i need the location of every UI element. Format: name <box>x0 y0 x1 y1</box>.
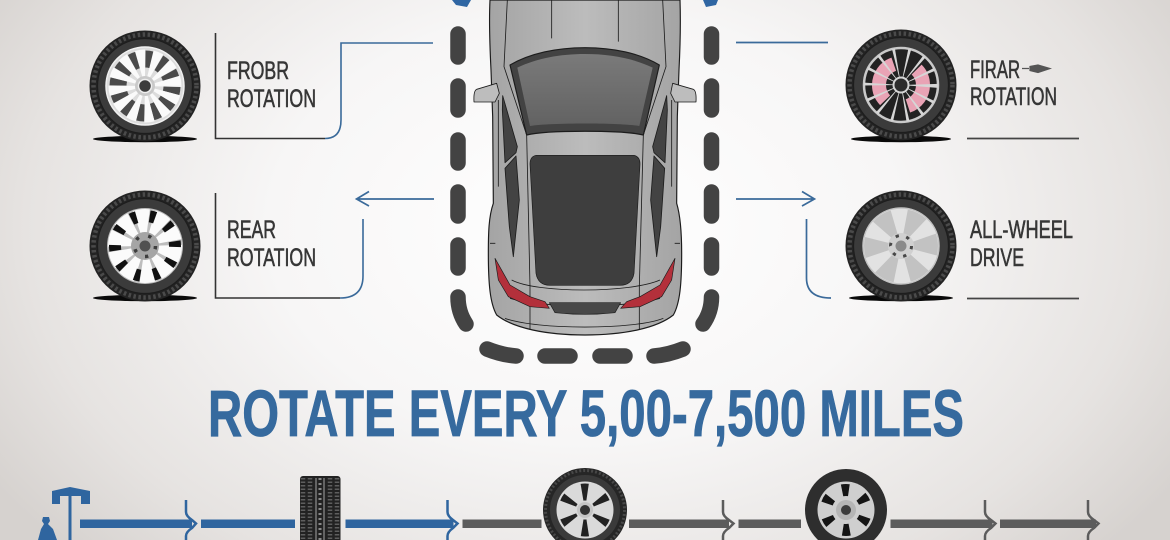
timeline: grey segments <box>462 520 1096 528</box>
label: REAR ROTATION <box>227 216 316 272</box>
car tail lights <box>495 258 675 308</box>
dashed rotation path around car <box>458 34 712 356</box>
label: FIRAR ROTATION <box>970 56 1057 111</box>
label: REAR ROTATION: REAR <box>227 216 276 244</box>
connector: right lower curve <box>806 219 831 298</box>
label: ALL-WHEEL DRIVE: DRIVE <box>970 244 1024 272</box>
label: FROBR ROTATION <box>227 57 316 113</box>
rule under FIRAR ROTATION <box>967 138 1079 140</box>
car windshield <box>510 48 659 135</box>
arrow: pointing right <box>736 192 814 206</box>
icon: tyre tread <box>300 476 340 540</box>
front wheel (front-left) <box>90 30 200 142</box>
car body lines <box>490 0 680 330</box>
timeline wheel 2 <box>805 469 887 540</box>
timeline: blue segments <box>80 520 454 528</box>
timeline wheel 1 <box>543 468 627 540</box>
car body <box>488 0 682 335</box>
rear wheel (rear-left) <box>90 190 200 302</box>
car top view <box>474 0 696 335</box>
connector: front rotation <box>216 33 433 138</box>
timeline: blue chevrons <box>186 500 458 540</box>
connector: right top line <box>736 42 828 44</box>
label: ALL-WHEEL DRIVE: ALL-WHEEL <box>970 216 1073 244</box>
wheel: all-wheel drive <box>846 190 956 302</box>
wheel: front-right with pink brake <box>846 30 956 142</box>
top blue arrow fragments <box>452 0 718 7</box>
car side windows <box>502 96 667 257</box>
arrow: pointing left <box>356 192 434 206</box>
icon: blue lift post with person <box>38 487 90 540</box>
connector: rear rotation <box>216 193 363 298</box>
car rear bumper recess <box>549 303 621 314</box>
timeline: grey chevrons <box>723 500 1098 540</box>
label: FIRAR ROTATION: ROTATION <box>970 83 1057 111</box>
rule under ALL-WHEEL DRIVE <box>967 298 1079 300</box>
label: FIRAR ROTATION: FIRAR <box>970 56 1020 84</box>
label: FROBR ROTATION: FROBR <box>227 57 289 85</box>
car mirrors <box>474 83 696 102</box>
car roof panel <box>530 155 640 285</box>
label: REAR ROTATION: ROTATION <box>227 244 316 272</box>
label: FROBR ROTATION: ROTATION <box>227 85 316 113</box>
label: ALL-WHEEL DRIVE <box>970 216 1073 272</box>
